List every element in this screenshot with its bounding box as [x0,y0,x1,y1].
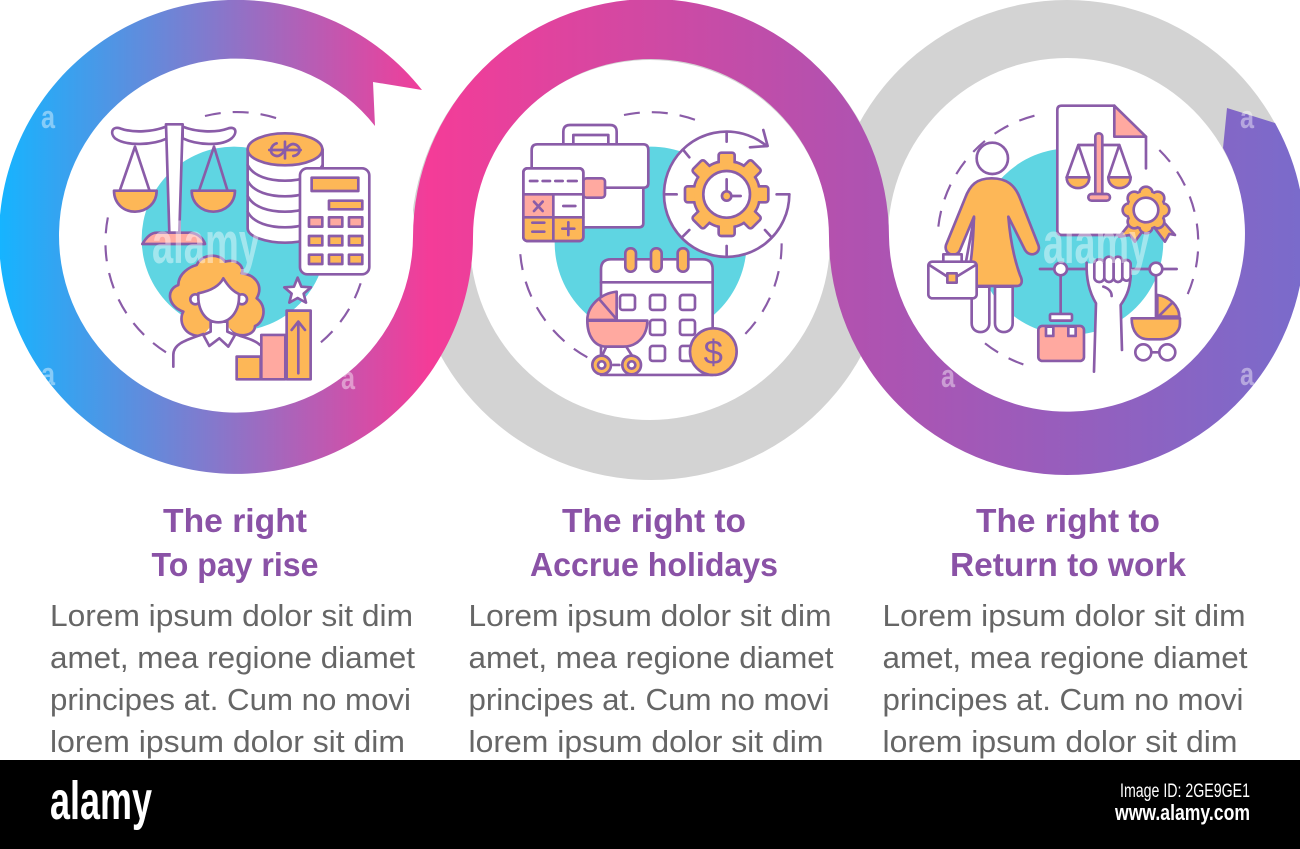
white circle: left step [59,59,415,415]
white circle: right step [888,58,1246,416]
calendar [601,248,713,375]
teal backdrop [555,147,747,339]
body text: lorem ipsum dolor sit dim [882,724,1238,759]
heading [530,502,778,583]
icon: briefcase, calculator, gear clock, calendar, stroller and coin [520,112,789,375]
legal document [1057,106,1146,235]
raised fist [1087,257,1131,372]
body text: lorem ipsum dolor sit dim [50,724,405,759]
calculator [300,168,369,274]
body text: amet, mea regione diamet [50,640,415,675]
heading: Accrue holidays [530,546,778,583]
icon: woman, legal document, rosette, fist and balance of work and family [928,106,1198,372]
body text: lorem ipsum dolor sit dim [468,724,824,759]
dashed orbit [520,112,782,357]
orange stroller [1132,295,1180,360]
dashed orbit [938,114,1198,365]
website: www.alamy.com [1114,800,1250,825]
column: the right to accrue holidays [468,502,834,759]
body text [882,598,1248,759]
growth bars [237,311,311,379]
body text [468,598,834,759]
icon: scales, coins, calculator, woman and growth bars [105,112,369,380]
gray ring: right step [830,0,1300,474]
watermark marks: a [1240,99,1254,135]
body text: Lorem ipsum dolor sit dim [468,598,832,633]
watermark: right: alamy [1043,211,1150,276]
dashed orbit [105,112,361,352]
gray ring: middle step [411,0,891,480]
column: the right to return to work [882,502,1248,759]
body text: Lorem ipsum dolor sit dim [882,598,1246,633]
balance scale [112,124,235,244]
body text: amet, mea regione diamet [882,640,1248,675]
briefcase [532,125,648,227]
footer logo: alamy [50,771,152,831]
watermark marks [41,99,1254,396]
body text: principes at. Cum no movi [882,682,1244,717]
body text [50,598,415,759]
dollar coin: $ [704,334,723,372]
body text: amet, mea regione diamet [468,640,834,675]
footer bar [0,760,1300,849]
body text: Lorem ipsum dolor sit dim [50,598,413,633]
white circle: middle step [470,60,830,420]
gear [685,153,768,236]
watermark marks: a [41,356,55,392]
teal backdrop [977,148,1163,335]
gear clock cycle [664,130,789,257]
small calculator [523,168,583,241]
watermark marks: a [941,358,955,394]
star [284,278,311,303]
body text: principes at. Cum no movi [468,682,830,717]
watermark: left: alamy [152,211,260,276]
heading [152,502,318,583]
gradient ribbon arrow [0,0,1300,475]
baby stroller [587,292,647,374]
heading: The right [163,502,307,539]
image id: Image ID: 2GE9GE1 [1120,781,1250,802]
heading: The right to [976,502,1160,539]
dollar coin [690,328,737,375]
woman in dress [946,143,1039,332]
watermark marks: a [41,99,55,135]
work case [1038,314,1084,361]
body text: principes at. Cum no movi [50,682,411,717]
woman with curly hair [170,256,264,380]
balance line [1040,263,1177,317]
heading [950,502,1187,583]
heading: To pay rise [152,546,318,583]
column: the right to pay rise [50,502,415,759]
woman's briefcase [928,254,977,298]
watermark marks: a [1240,356,1254,392]
teal backdrop [142,147,326,331]
heading: Return to work [950,546,1187,583]
coin stack [248,133,323,243]
heading: The right to [562,502,746,539]
award rosette [1119,187,1175,242]
watermark marks: a [341,360,355,396]
